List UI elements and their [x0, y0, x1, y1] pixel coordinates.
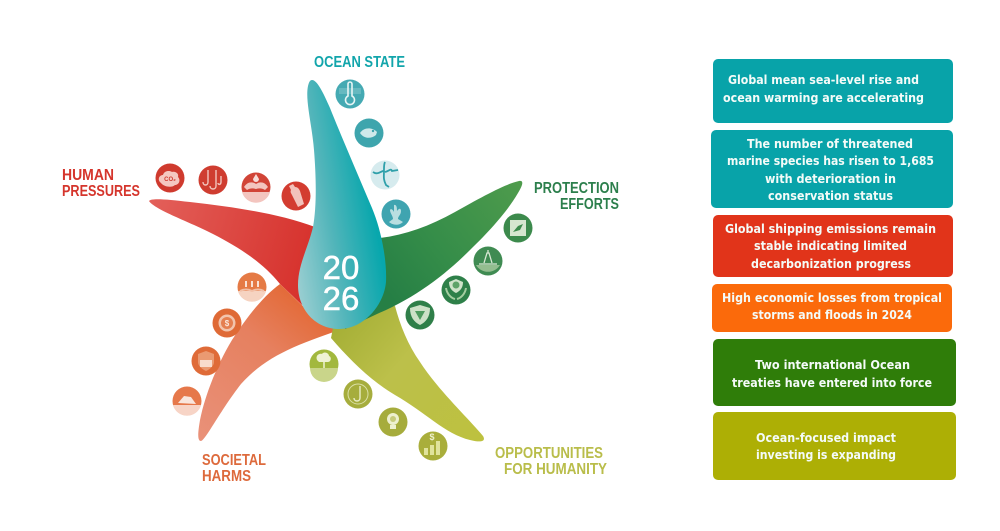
icon: blue carbon tree: [310, 350, 338, 382]
section label: human pressures: [62, 167, 140, 200]
starfish diagram: [149, 80, 522, 441]
icon: fishing hooks: [198, 166, 228, 194]
panel: threatened species key finding: marine species has risen to 1,685: [727, 153, 934, 168]
panel: economic losses key finding: storms and floods in 2024: [752, 307, 912, 322]
icon: ocean monitoring buoy: [474, 246, 502, 276]
icon: marine protected area shield: [406, 300, 434, 330]
section label: opportunities for humanity: [495, 445, 608, 478]
section label: protection efforts: PROTECTION: [534, 180, 619, 197]
arm: ocean state drop: [298, 80, 386, 329]
panel: threatened species key finding: with deterioration in: [765, 171, 896, 186]
icon: CO2 cloud: [156, 164, 184, 192]
year label: [323, 249, 359, 317]
year label: 20: [323, 249, 359, 286]
icon: investment bars: $: [429, 432, 435, 442]
icon: sustainable fishing hook: [344, 380, 372, 408]
icon: oil spill: [242, 172, 270, 203]
icon: light bulb: [378, 408, 408, 436]
arm: protection efforts: [345, 181, 522, 329]
panel: shipping emissions key finding: Global shipping emissions remain: [725, 221, 936, 236]
panel: threatened species key finding: conservation status: [768, 188, 893, 203]
icon: protected hands: [442, 276, 470, 304]
panel: shipping emissions key finding: stable indicating limited: [754, 238, 907, 253]
section label: human pressures: PRESSURES: [62, 183, 140, 200]
panel: ocean treaties key finding: [713, 339, 956, 406]
panel: economic losses key finding: High economic losses from tropical: [722, 290, 942, 305]
icon: treaty document: [504, 214, 532, 242]
section label: protection efforts: EFFORTS: [560, 196, 619, 213]
panel: threatened species key finding: [711, 130, 953, 208]
icon: investment bars: [418, 432, 448, 460]
panel: ocean treaties key finding: Two international Ocean: [755, 357, 910, 372]
panel: sea level key finding: [713, 59, 953, 123]
year label: 26: [323, 280, 359, 317]
section label: protection efforts: [534, 180, 619, 213]
icon: health shield: [192, 346, 220, 376]
icon: economic loss: $: [225, 319, 230, 328]
panel: sea level key finding: Global mean sea-level rise and: [728, 72, 919, 87]
icon: coral: [382, 200, 410, 228]
section label: opportunities for humanity: FOR HUMANITY: [504, 461, 608, 478]
panel: sea level key finding: ocean warming are accelerating: [723, 90, 924, 105]
panel: shipping emissions key finding: decarbonization progress: [751, 256, 911, 271]
panel: shipping emissions key finding: [713, 215, 953, 277]
icon: fish: [354, 118, 384, 148]
section label: societal harms: [202, 452, 266, 485]
panel: impact investing key finding: investing is expanding: [756, 447, 896, 462]
section label: ocean state: OCEAN STATE: [314, 54, 405, 71]
icon: plastic bottle: [282, 182, 310, 210]
section label: societal harms: SOCIETAL: [202, 452, 266, 469]
panel: impact investing key finding: [713, 412, 956, 480]
icon: economic loss: [212, 308, 242, 338]
section label: opportunities for humanity: OPPORTUNITIES: [495, 445, 603, 462]
panel: economic losses key finding: [712, 284, 952, 332]
section label: societal harms: HARMS: [202, 468, 251, 485]
icon: cracked coral: [370, 160, 400, 190]
panel: impact investing key finding: Ocean-focused impact: [756, 430, 896, 445]
icon: thermometer: [336, 80, 364, 108]
icon: damaged coast home: [172, 386, 202, 416]
arm: opportunities for humanity: [331, 300, 484, 441]
icon: displaced people: [238, 272, 266, 302]
arm: societal harms: [198, 284, 345, 441]
panel: threatened species key finding: The number of threatened: [747, 136, 913, 151]
arm: human pressures: [149, 199, 345, 320]
icon: CO2 cloud: CO₂: [164, 177, 176, 183]
section label: human pressures: HUMAN: [62, 167, 114, 184]
panel: ocean treaties key finding: treaties have entered into force: [732, 375, 932, 390]
